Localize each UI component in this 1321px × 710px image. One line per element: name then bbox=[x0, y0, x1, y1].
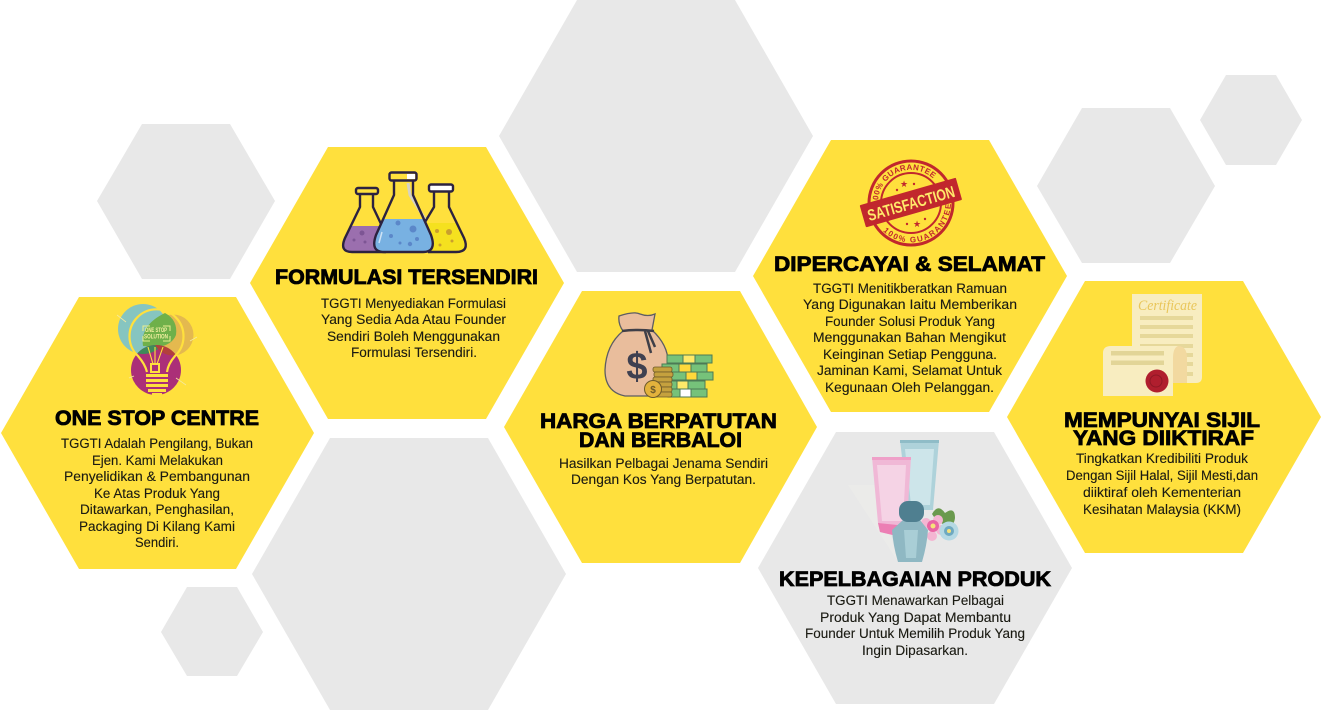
text: one stop centre body bbox=[61, 436, 253, 550]
text: one stop centre body: TGGTI Adalah Pengilang, Bukan bbox=[61, 436, 253, 451]
text: one stop centre body: Ejen. Kami Melakukan bbox=[92, 453, 223, 468]
text: formulasi body: Sendiri Boleh Menggunakan bbox=[327, 329, 500, 344]
text: one stop centre body: Sendiri. bbox=[135, 535, 179, 550]
text: formulasi body bbox=[321, 296, 507, 360]
text: kepelbagaian body: Ingin Dipasarkan. bbox=[862, 643, 968, 658]
text: dipercayai body: Jaminan Kami, Selamat Untuk bbox=[817, 363, 1002, 378]
text: kepelbagaian body: Produk Yang Dapat Membantu bbox=[820, 610, 1011, 625]
panel: dipercayai dan selamat bbox=[753, 140, 1067, 412]
text: formulasi body: Formulasi Tersendiri. bbox=[351, 345, 477, 360]
text: dipercayai body: Yang Digunakan Iaitu Memberikan bbox=[803, 297, 1017, 312]
text: sijil body: Tingkatkan Kredibiliti Produk bbox=[1076, 451, 1248, 466]
text: harga body: Dengan Kos Yang Berpatutan. bbox=[571, 472, 756, 487]
icon: satisfaction stamp bbox=[860, 160, 962, 246]
icon: light bulb: ONE STOP bbox=[145, 328, 167, 334]
text: one stop centre body: Penyelidikan & Pembangunan bbox=[64, 469, 250, 484]
text: kepelbagaian body bbox=[805, 593, 1025, 658]
icon: satisfaction stamp: ★ bbox=[900, 180, 908, 190]
heading: mempunyai sijil: YANG DIIKTIRAF bbox=[1073, 427, 1254, 450]
text: sijil body: diiktiraf oleh Kementerian bbox=[1083, 485, 1241, 500]
panel: kepelbagaian produk bbox=[758, 432, 1072, 704]
heading: formulasi tersendiri: FORMULASI TERSENDIRI bbox=[275, 266, 538, 289]
icon: satisfaction stamp: ★ bbox=[913, 220, 921, 230]
panel: harga berpatutan bbox=[504, 291, 817, 563]
text: one stop centre body: Ditawarkan, Penghasilan, bbox=[80, 502, 234, 517]
panel: formulasi tersendiri bbox=[250, 147, 564, 419]
icon: money bag: $ bbox=[626, 346, 648, 388]
text: kepelbagaian body: Founder Untuk Memilih Produk Yang bbox=[805, 626, 1025, 641]
text: dipercayai body: Kegunaan Oleh Pelanggan. bbox=[825, 380, 994, 395]
icon: flasks bbox=[343, 172, 466, 252]
text: sijil body: Kesihatan Malaysia (KKM) bbox=[1083, 502, 1241, 517]
icon: money bag bbox=[605, 313, 713, 398]
panel: mempunyai sijil bbox=[1007, 281, 1321, 553]
text: sijil body: Dengan Sijil Halal, Sijil Mesti,dan bbox=[1066, 468, 1258, 483]
heading: mempunyai sijil bbox=[1064, 409, 1260, 450]
text: dipercayai body: Menggunakan Bahan Mengikut bbox=[813, 330, 1006, 345]
text: harga body: Hasilkan Pelbagai Jenama Sendiri bbox=[559, 456, 768, 471]
text: harga body bbox=[559, 456, 768, 487]
heading: harga berpatutan: DAN BERBALOI bbox=[579, 429, 742, 452]
icon: light bulb bbox=[117, 304, 197, 395]
panel: one stop centre bbox=[1, 297, 314, 569]
heading: kepelbagaian produk: KEPELBAGAIAN PRODUK bbox=[779, 568, 1051, 591]
icon: satisfaction stamp: SATISFACTION bbox=[866, 184, 957, 225]
heading: mempunyai sijil: MEMPUNYAI SIJIL bbox=[1064, 409, 1260, 432]
text: formulasi body: Yang Sedia Ada Atau Founder bbox=[321, 312, 507, 327]
text: sijil body bbox=[1066, 451, 1258, 517]
text: kepelbagaian body: TGGTI Menawarkan Pelbagai bbox=[827, 593, 1004, 608]
heading: dipercayai dan selamat: DIPERCAYAI & SELAMAT bbox=[774, 253, 1045, 276]
text: one stop centre body: Ke Atas Produk Yang bbox=[94, 486, 220, 501]
text: dipercayai body: Founder Solusi Produk Yang bbox=[825, 314, 995, 329]
text: dipercayai body bbox=[803, 281, 1017, 395]
text: formulasi body: TGGTI Menyediakan Formulasi bbox=[321, 296, 506, 311]
icon: satisfaction stamp: 100% GUARANTEE bbox=[883, 204, 951, 242]
icon: certificate: Certificate bbox=[1138, 298, 1197, 314]
icon: light bulb: SOLUTION bbox=[144, 334, 168, 340]
icon: cosmetics bbox=[848, 440, 958, 562]
heading: harga berpatutan: HARGA BERPATUTAN bbox=[540, 410, 777, 433]
text: dipercayai body: TGGTI Menitikberatkan Ramuan bbox=[813, 281, 1007, 296]
icon: satisfaction stamp: 100% GUARANTEE bbox=[872, 164, 936, 200]
heading: one stop centre: ONE STOP CENTRE bbox=[55, 407, 259, 430]
heading: harga berpatutan bbox=[540, 410, 777, 452]
icon: money bag: $ bbox=[650, 385, 656, 396]
text: dipercayai body: Keinginan Setiap Pengguna. bbox=[823, 347, 997, 362]
text: one stop centre body: Packaging Di Kilang Kami bbox=[79, 519, 235, 534]
icon: certificate bbox=[1103, 294, 1202, 396]
